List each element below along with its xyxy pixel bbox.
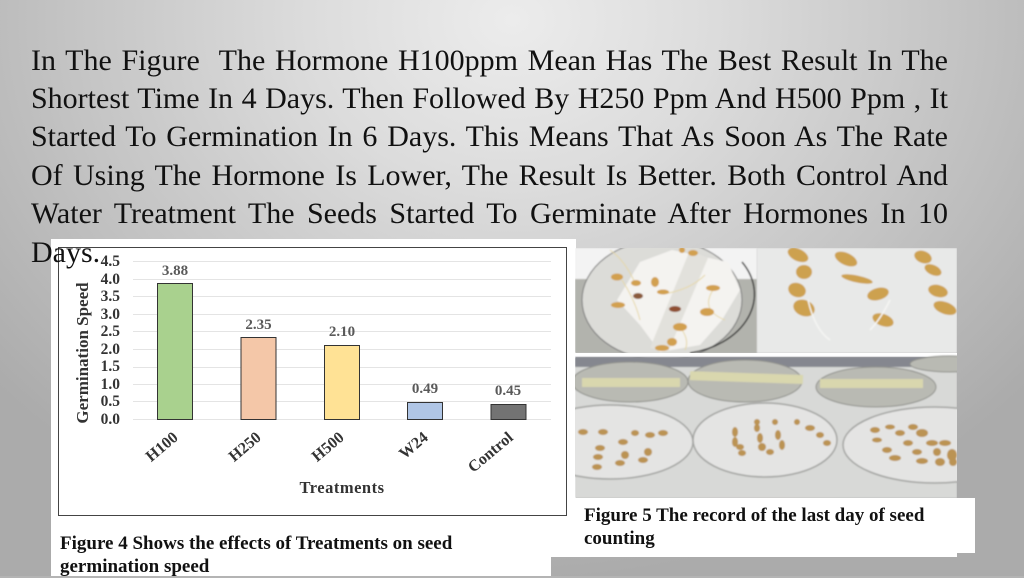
y axis tick labels: 3.5	[101, 288, 120, 305]
y axis tick labels: 0.0	[101, 411, 120, 428]
y axis tick labels: 1.0	[101, 376, 120, 393]
value labels: 0.49	[412, 381, 438, 397]
bars	[158, 284, 526, 420]
value labels: 3.88	[162, 263, 188, 279]
caption text: figure 4	[60, 533, 452, 577]
y axis tick labels: 0.5	[101, 393, 120, 410]
y axis tick labels	[101, 253, 120, 428]
category labels: H250	[226, 429, 265, 465]
caption text: figure 5: Figure 5 The record of the last day of seed	[584, 505, 924, 526]
paragraph text: In The Figure The Hormone H100ppm Mean Has The Best Result In The	[31, 44, 948, 77]
y axis tick labels: 4.5	[101, 253, 120, 270]
category labels: H100	[143, 429, 182, 465]
photo: six petri dishes on bench	[527, 356, 1024, 498]
value labels: 2.35	[245, 317, 272, 333]
y axis tick labels: 2.5	[101, 323, 120, 340]
white panel extension to photos	[551, 239, 576, 557]
caption panel: figure 5	[576, 498, 975, 553]
y axis title: Germination Speed	[73, 282, 92, 424]
value labels: 0.45	[495, 383, 521, 399]
paragraph text: Water Treatment The Seeds Started To Germinate After Hormones In 10	[31, 197, 948, 230]
paragraph text: Started To Germination In 6 Days. This Means That As Soon As The Rate	[31, 120, 948, 153]
x axis title: Treatments	[299, 478, 385, 497]
y axis tick labels: 1.5	[101, 358, 120, 375]
category labels: W24	[396, 429, 432, 463]
bar chart: germination speed by treatment	[58, 247, 567, 516]
caption text: figure 4: Figure 4 Shows the effects of Treatments on seed	[60, 533, 452, 554]
paragraph text: Days.	[31, 236, 100, 269]
white strip beneath photos	[551, 498, 957, 557]
category labels	[143, 429, 517, 476]
y axis tick labels: 2.0	[101, 341, 120, 358]
paragraph text: Shortest Time In 4 Days. Then Followed By H250 Ppm And H500 Ppm , It	[31, 82, 948, 115]
paragraph text: Of Using The Hormone Is Lower, The Result Is Better. Both Control And	[31, 159, 948, 192]
paragraph text	[31, 44, 948, 269]
caption text: figure 5: counting	[584, 528, 655, 549]
value labels	[162, 263, 521, 399]
y axis tick labels: 3.0	[101, 306, 120, 323]
photo: seedlings on tissue in dish	[575, 240, 757, 360]
category labels: H500	[309, 429, 348, 465]
value labels: 2.10	[329, 324, 355, 340]
caption text: figure 4: germination speed	[60, 556, 209, 577]
caption text: figure 5	[584, 505, 924, 549]
white panel behind chart	[51, 239, 551, 576]
y axis tick labels: 4.0	[101, 271, 120, 288]
photo: close-up of germinating seeds	[757, 245, 958, 353]
photo collage: germinated seeds in petri dishes	[575, 248, 957, 498]
photo separator	[575, 353, 957, 357]
category labels: Control	[465, 429, 517, 476]
